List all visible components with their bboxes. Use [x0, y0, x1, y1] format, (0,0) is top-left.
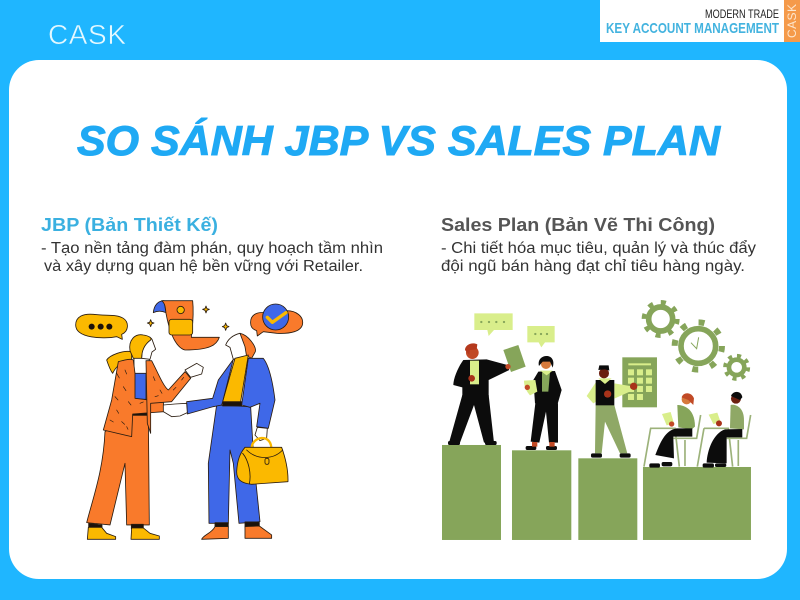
title: SO SÁNH JBP VS SALES PLAN: [77, 117, 722, 164]
text block: Sales Plan: [441, 214, 756, 275]
icon: contract scroll: [153, 301, 219, 350]
icon: sparkles: [147, 306, 229, 330]
illustration: Sales Plan team on podiums: [442, 303, 751, 540]
figure: presenter with folder: [448, 343, 526, 445]
text block: JBP: và xây dựng quan hệ bền vững với Retailer.: [44, 258, 363, 275]
figure: man in blue suit with bag: [187, 333, 288, 539]
icon: gears and clock: [644, 303, 748, 379]
text block: Sales Plan: - Chi tiết hóa mục tiêu, quản lý và thúc đẩy: [441, 240, 756, 257]
illustration: JBP handshake negotiation: [76, 301, 303, 539]
icon: speech bubble with dots: [76, 314, 127, 339]
icon: handshake: [163, 403, 187, 417]
badge: modern trade key account management: MODERN TRADE: [705, 7, 779, 21]
text block: Sales Plan: đội ngũ bán hàng đạt chỉ tiêu hàng ngày.: [441, 258, 745, 275]
logo: CASK: CASK: [48, 19, 129, 50]
figure: man with calculator: [587, 357, 657, 458]
figure: woman in black suit: [524, 356, 562, 450]
badge: modern trade key account management: [600, 0, 800, 42]
icon: approval bubble: [251, 304, 303, 336]
text block: Sales Plan: Sales Plan (Bản Vẽ Thi Công): [441, 214, 715, 235]
text block: JBP: [41, 214, 383, 275]
text block: JBP: - Tạo nền tảng đàm phán, quy hoạch tầm nhìn: [41, 240, 383, 257]
text block: JBP: JBP (Bản Thiết Kế): [41, 214, 218, 235]
badge: modern trade key account management: CASK: [785, 4, 799, 38]
figure: seated colleagues: [644, 392, 751, 468]
figure: woman in orange suit: [87, 335, 203, 539]
podiums: [442, 445, 751, 540]
icon: speech bubbles: [474, 313, 555, 347]
